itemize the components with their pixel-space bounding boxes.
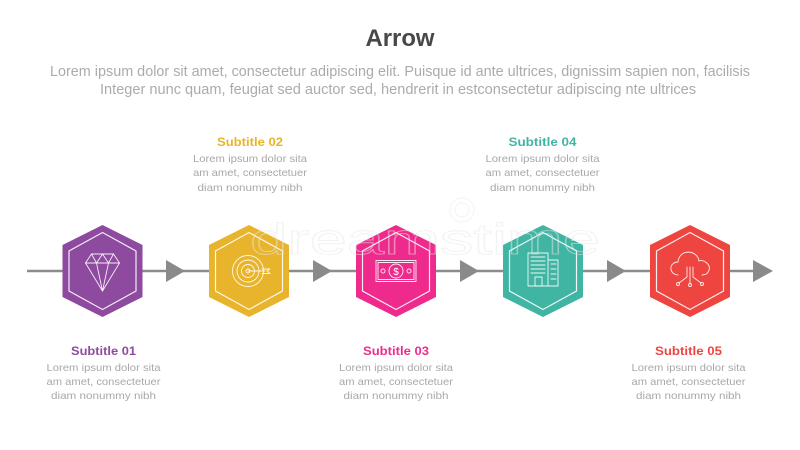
- intro text: Lorem ipsum dolor sit amet, consectetur adipiscing elit. Puisque id ante ultrices, dignissim sapien non, facilisis: [50, 64, 750, 80]
- title: Arrow: [366, 25, 435, 52]
- label: subtitle 04: Lorem ipsum dolor sita: [486, 153, 600, 165]
- label: subtitle 05: [632, 344, 746, 402]
- label: subtitle 04: diam nonummy nibh: [490, 182, 595, 194]
- label: subtitle 01: [46, 344, 161, 402]
- label: subtitle 04: Subtitle 04: [508, 135, 577, 149]
- step 4: teal hexagon with office buildings icon: [503, 225, 583, 317]
- label: subtitle 05: Lorem ipsum dolor sita: [632, 362, 746, 374]
- label: subtitle 01: am amet, consectetuer: [46, 376, 161, 388]
- label: subtitle 05: Subtitle 05: [655, 344, 722, 358]
- watermark: dreamstime: [250, 215, 600, 264]
- label: subtitle 02: diam nonummy nibh: [198, 182, 303, 194]
- step 5: red hexagon with cloud network icon: [650, 225, 730, 317]
- step 3: pink hexagon with banknote icon: [356, 225, 436, 317]
- label: subtitle 02: am amet, consectetuer: [193, 167, 308, 179]
- label: subtitle 05: diam nonummy nibh: [636, 390, 741, 402]
- label: subtitle 01: Subtitle 01: [71, 344, 136, 358]
- label: subtitle 03: Subtitle 03: [363, 344, 429, 358]
- step 2: yellow hexagon with target icon: [209, 225, 289, 317]
- label: subtitle 01: diam nonummy nibh: [51, 390, 156, 402]
- label: subtitle 03: am amet, consectetuer: [339, 376, 454, 388]
- label: subtitle 03: [339, 344, 454, 402]
- step 1: purple hexagon with diamond icon: [62, 225, 142, 317]
- watermark: [250, 198, 600, 264]
- label: subtitle 04: [486, 135, 600, 194]
- label: subtitle 02: Lorem ipsum dolor sita: [193, 153, 307, 165]
- timeline arrow line: [27, 260, 773, 282]
- label: subtitle 03: diam nonummy nibh: [344, 390, 449, 402]
- label: subtitle 04: am amet, consectetuer: [486, 167, 600, 179]
- label: subtitle 02: Subtitle 02: [217, 135, 283, 149]
- label: subtitle 03: Lorem ipsum dolor sita: [339, 362, 453, 374]
- label: subtitle 05: am amet, consectetuer: [632, 376, 746, 388]
- step 3: pink hexagon with banknote icon: $: [393, 267, 399, 278]
- label: subtitle 02: [193, 135, 308, 194]
- label: subtitle 01: Lorem ipsum dolor sita: [46, 362, 161, 374]
- intro text: Integer nunc quam, feugiat sed auctor sed, hendrerit in estconsectetur adipiscing nte ultrices: [100, 82, 696, 98]
- intro text: [50, 64, 750, 98]
